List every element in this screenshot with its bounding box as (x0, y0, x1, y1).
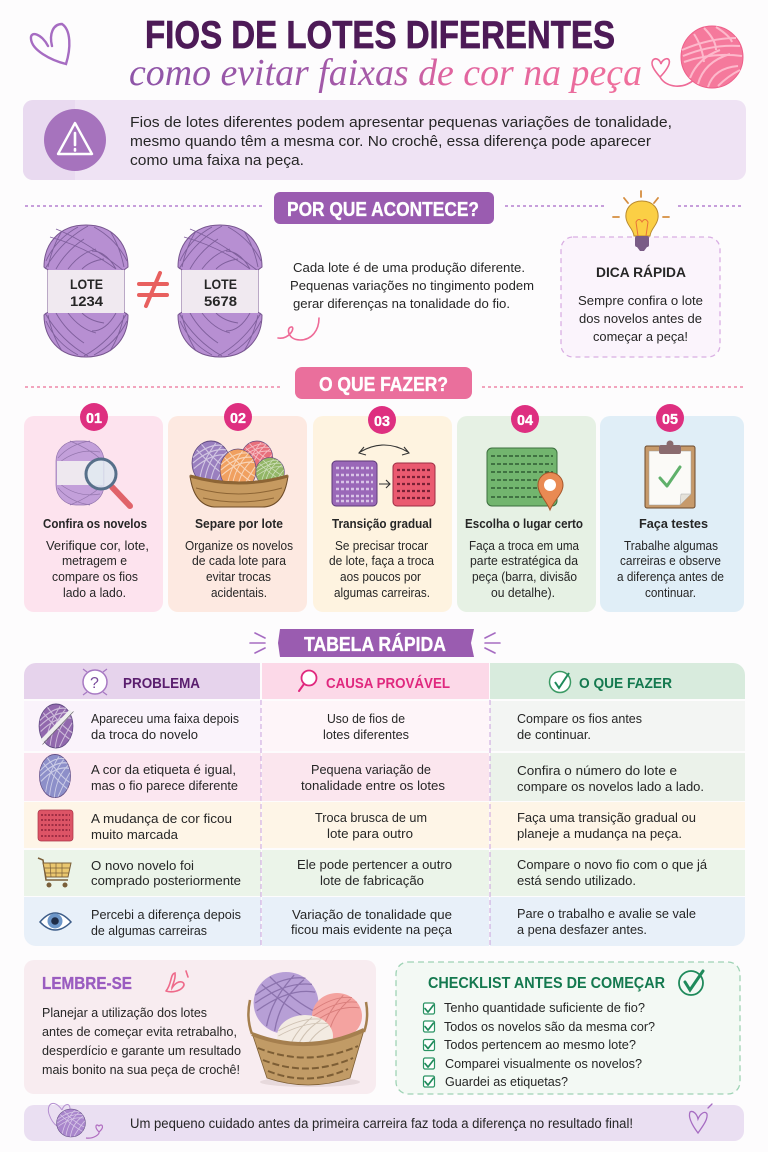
row 3: planeje a mudança na peça. (517, 827, 682, 841)
step title: Separe por lote (195, 517, 283, 531)
text: Planejar a utilização dos lotes (42, 1006, 207, 1020)
subtitle: como evitar faixas de cor na peça (129, 52, 642, 94)
row 4 (24, 850, 745, 896)
icon: pink yarn ball with heart (652, 26, 743, 88)
step text: carreiras e observe (620, 554, 721, 568)
row 3: A mudança de cor ficou (91, 812, 232, 826)
badge 04: 04 (517, 412, 534, 429)
row 2 (24, 753, 745, 801)
icon: skein lote 5678: LOTE (204, 276, 237, 292)
row 1: Uso de fios de (327, 712, 405, 726)
decoration: pink squiggle (278, 318, 319, 340)
heading: por que acontece (25, 192, 744, 224)
step text: algumas carreiras. (334, 586, 430, 600)
step text: evitar trocas (206, 570, 271, 584)
checklist items: Comparei visualmente os novelos? (445, 1057, 642, 1071)
icon: purple heart doodle (31, 24, 69, 64)
step title: Faça testes (639, 517, 708, 531)
row 2: Pequena variação de (311, 763, 431, 777)
intro text: como uma faixa na peça. (130, 152, 304, 169)
text: antes de começar evita retrabalho, (42, 1025, 237, 1039)
panel: step 04 (457, 405, 596, 612)
header: problema: ? (90, 675, 99, 692)
footer banner (24, 1103, 744, 1141)
row 4: O novo novelo foi (91, 859, 194, 873)
footer text: Um pequeno cuidado antes da primeira carreira faz toda a diferença no resultado final! (130, 1116, 633, 1131)
header: causa provavel (262, 663, 489, 699)
table: tabela rapida (24, 663, 745, 946)
icon: skein with magnifier (56, 441, 130, 506)
row 1: Apareceu uma faixa depois (91, 712, 239, 726)
intro text: Fios de lotes diferentes podem apresentar pequenas variações de tonalidade, (130, 114, 672, 131)
row 3: lote para outro (327, 827, 413, 841)
heading: tabela rapida (250, 629, 500, 657)
step text (329, 539, 434, 600)
row 4: lote de fabricação (320, 874, 424, 888)
panel: dica rapida: DICA RÁPIDA (596, 265, 686, 280)
row 5: Percebi a diferença depois (91, 908, 241, 922)
row 4: Ele pode pertencer a outro (297, 858, 452, 872)
step text: aos poucos por (340, 570, 421, 584)
icon: clipboard with check (645, 440, 695, 508)
panel: step 01 (24, 403, 163, 612)
badge 05 (656, 404, 684, 432)
icon: basket with yarn balls (190, 441, 288, 507)
heading: por que acontece: POR QUE ACONTECE? (287, 199, 479, 221)
text: desperdício e garante um resultado (42, 1044, 241, 1058)
step text: de lote, faça a troca (329, 554, 434, 568)
icon: skein lote 5678: 5678 (204, 293, 237, 309)
step text: metragem e (62, 554, 127, 568)
icon: green swatch with map pin (487, 448, 563, 510)
step text: parte estratégica da (470, 554, 578, 568)
row 1: lotes diferentes (323, 728, 409, 742)
row 4: Compare o novo fio com o que já (517, 858, 707, 872)
header: problema: PROBLEMA (123, 676, 200, 692)
heading: o que fazer (25, 367, 744, 399)
step text: Trabalhe algumas (624, 539, 718, 553)
step text: acidentais. (211, 586, 267, 600)
row 5: a pena desfazer antes. (517, 923, 647, 937)
panel: step 05 (600, 404, 744, 612)
row 1 (24, 701, 745, 751)
step text: Verifique cor, lote, (46, 539, 149, 553)
step text: continuar. (645, 586, 696, 600)
step text (185, 539, 293, 600)
panel: dica rapida: dos novelos antes de (579, 312, 702, 326)
icon: check circle (679, 971, 703, 995)
badge 03 (368, 406, 396, 434)
row 5: ficou mais evidente na peça (291, 923, 452, 937)
step text (469, 539, 579, 600)
checklist items: Todos pertencem ao mesmo lote? (444, 1038, 636, 1052)
step text (46, 539, 149, 600)
intro text: mesmo quando têm a mesma cor. No crochê, essa diferença pode aparecer (130, 133, 651, 150)
text: why it happens: Cada lote é de uma produção diferente. (293, 261, 525, 275)
icon: skein lote 1234: 1234 (70, 293, 103, 309)
step text: peça (barra, divisão (472, 570, 577, 584)
panel: dica rapida: Sempre confira o lote (578, 294, 703, 308)
row 2: tonalidade entre os lotes (301, 779, 445, 793)
icon: yarn crossed out (39, 704, 74, 748)
row 2: A cor da etiqueta é igual, (91, 763, 236, 777)
row 5 (24, 897, 745, 946)
row 4: comprado posteriormente (91, 874, 241, 888)
heading: LEMBRE-SE (42, 973, 132, 993)
badge 03: 03 (374, 413, 390, 430)
row 4: está sendo utilizado. (517, 874, 636, 888)
step text: lado a lado. (63, 586, 126, 600)
intro text (130, 114, 672, 169)
badge 02: 02 (230, 410, 246, 427)
checklist items: Todos os novelos são da mesma cor? (444, 1020, 655, 1034)
badge 04 (511, 405, 539, 433)
step text: de cada lote para (192, 554, 286, 568)
icon: warning triangle (44, 109, 106, 171)
panel: step 03 (313, 406, 452, 612)
text: mais bonito na sua peça de crochê! (42, 1063, 240, 1077)
icon: eye (40, 913, 71, 930)
row 2: mas o fio parece diferente (91, 779, 238, 793)
header: problema (24, 663, 260, 699)
row 5: de algumas carreiras (91, 924, 207, 938)
panel: checklist (396, 962, 740, 1094)
step title: Confira os novelos (43, 517, 147, 531)
heading: CHECKLIST ANTES DE COMEÇAR (428, 975, 665, 992)
row 1: de continuar. (517, 728, 591, 742)
badge 01 (80, 403, 108, 431)
image: basket of yarn (248, 972, 367, 1087)
icon: not equal sign (139, 273, 167, 306)
step title: Escolha o lugar certo (465, 517, 583, 531)
panel: alert intro (23, 100, 746, 180)
row 3 (24, 802, 745, 848)
row 2: Confira o número do lote e (517, 764, 677, 778)
icon: blue yarn ball (39, 754, 71, 798)
panel: dica rapida: começar a peça! (593, 330, 688, 344)
text (42, 1006, 241, 1077)
row 1: da troca do novelo (91, 728, 198, 742)
checklist items: Guardei as etiquetas? (445, 1075, 568, 1089)
icon: skein lote 5678 (178, 225, 262, 357)
text: why it happens: Pequenas variações no tingimento podem (290, 279, 534, 293)
heading: o que fazer: O QUE FAZER? (319, 374, 448, 396)
step text: ou detalhe). (491, 586, 555, 600)
icon: red swatch (38, 810, 73, 841)
text: why it happens (290, 261, 534, 311)
row 3: muito marcada (91, 828, 178, 842)
header: o que fazer (490, 663, 745, 699)
row 3: Faça uma transição gradual ou (517, 811, 696, 825)
step text: a diferença antes de (617, 570, 724, 584)
panel: lembre-se (24, 960, 376, 1094)
icon: light bulb (613, 191, 669, 251)
icon: gradual transition swatches (332, 445, 435, 506)
title: FIOS DE LOTES DIFERENTES (145, 14, 615, 57)
badge 01: 01 (86, 410, 102, 427)
header: o que fazer: O QUE FAZER (579, 676, 672, 692)
icon: skein lote 1234: LOTE (70, 276, 103, 292)
step text (617, 539, 724, 600)
step text: Se precisar trocar (335, 539, 428, 553)
row 1: Compare os fios antes (517, 712, 642, 726)
row 5: Variação de tonalidade que (292, 908, 452, 922)
step text: Faça a troca em uma (469, 539, 579, 553)
heading: tabela rapida: TABELA RÁPIDA (304, 633, 446, 656)
panel: step 02 (168, 403, 307, 612)
row 5: Pare o trabalho e avalie se vale (517, 907, 696, 921)
icon: heart doodle (689, 1104, 712, 1133)
badge 02 (224, 403, 252, 431)
panel: dica rapida (561, 191, 720, 357)
text: why it happens: gerar diferenças na tonalidade do fio. (293, 297, 510, 311)
row 2: compare os novelos lado a lado. (517, 780, 704, 794)
badge 05: 05 (662, 411, 678, 428)
step text: compare os fios (52, 570, 138, 584)
checklist items: Tenho quantidade suficiente de fio? (444, 1001, 645, 1015)
step text: Organize os novelos (185, 539, 293, 553)
row 3: Troca brusca de um (315, 811, 427, 825)
step title: Transição gradual (332, 517, 432, 531)
checklist items (424, 1001, 655, 1089)
header: causa provavel: CAUSA PROVÁVEL (326, 675, 450, 692)
icon: pink heart (166, 971, 188, 992)
icon: skein lote 1234 (44, 225, 128, 357)
icon: purple yarn ball (48, 1103, 102, 1138)
icon: shopping cart (38, 858, 71, 888)
